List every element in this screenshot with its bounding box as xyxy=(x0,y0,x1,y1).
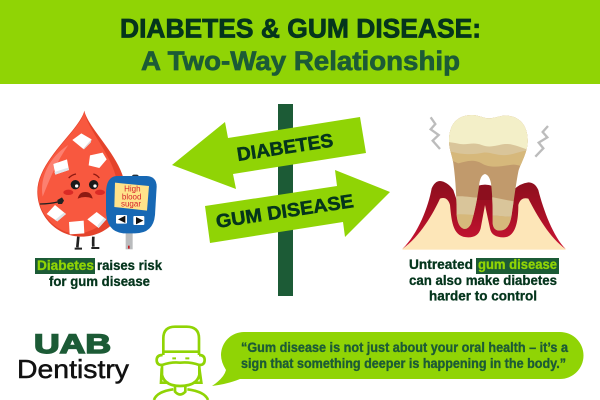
title line 1: DIABETES & GUM DISEASE: xyxy=(120,14,481,44)
icon: glucose meter: blood xyxy=(122,193,141,202)
icon: glucose meter xyxy=(106,175,157,249)
logo: UAB Dentistry xyxy=(17,329,129,384)
title line 2: A Two-Way Relationship xyxy=(141,46,460,76)
caption: gum disease: can also make diabetes xyxy=(409,273,557,288)
arrow sign: diabetes: DIABETES xyxy=(236,131,335,166)
speech bubble: sign that something deeper is happening in the body.” xyxy=(241,355,566,371)
caption: gum disease: harder to control xyxy=(429,288,537,304)
quote text: “Gum disease is not just about your oral health – it’s a xyxy=(241,339,568,355)
signpost post xyxy=(278,104,293,296)
icon: tooth with receding gum xyxy=(402,113,566,250)
icon: dentist with mask xyxy=(154,327,208,400)
caption: gum disease: gum disease xyxy=(478,257,557,272)
icon: glucose meter: sugar xyxy=(121,200,141,209)
caption: diabetes xyxy=(35,258,162,289)
arrow sign: gum disease xyxy=(205,170,390,243)
vibration marks xyxy=(431,117,440,149)
gum xyxy=(402,181,566,249)
sugar cubes xyxy=(47,133,107,234)
caption: gum disease: Untreated xyxy=(409,257,473,272)
speech bubble xyxy=(212,332,584,386)
caption: diabetes: raises risk xyxy=(97,258,162,273)
logo: UAB Dentistry: Dentistry xyxy=(17,354,129,384)
header banner xyxy=(0,0,600,84)
face xyxy=(63,174,105,199)
caption: diabetes: for gum disease xyxy=(49,274,150,289)
jaw cream xyxy=(402,198,566,249)
arm and legs xyxy=(40,202,59,204)
icon: glucose meter: High xyxy=(124,185,141,194)
arrow sign: diabetes xyxy=(172,117,366,189)
tooth layers xyxy=(447,113,530,233)
logo: UAB Dentistry: UAB xyxy=(34,329,111,359)
caption: gum disease xyxy=(409,257,559,304)
icon: blood drop character with sugar cubes xyxy=(37,111,126,249)
caption: diabetes: Diabetes xyxy=(37,258,94,273)
arrow sign: gum disease: GUM DISEASE xyxy=(215,191,355,233)
